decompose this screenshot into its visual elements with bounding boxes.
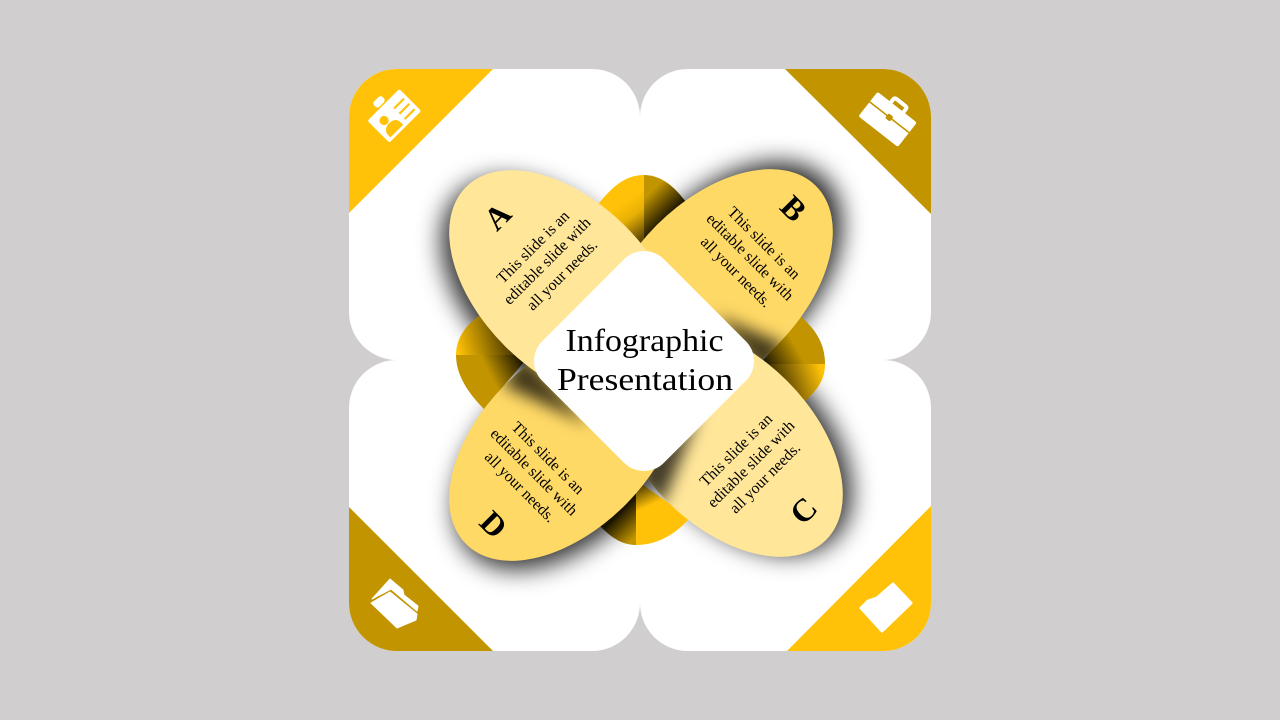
title: Infographic bbox=[566, 322, 724, 358]
icon: id card bbox=[361, 83, 421, 143]
panel: top-left quadrant bbox=[349, 69, 640, 360]
corner triangle: bottom-right bbox=[787, 506, 931, 651]
shadow on C near diamond bbox=[648, 420, 707, 506]
panel: bottom-left quadrant bbox=[349, 360, 640, 651]
text block A: This slide is an bbox=[494, 208, 573, 287]
text block C: This slide is an bbox=[697, 411, 776, 490]
text block D: This slide is an bbox=[508, 419, 587, 498]
shadow on B near diamond bbox=[715, 308, 788, 359]
shadow on D near diamond bbox=[503, 352, 590, 425]
panel: top-right quadrant bbox=[640, 69, 931, 360]
letter C: C bbox=[782, 489, 824, 531]
petal B bbox=[558, 126, 876, 444]
letter D: D bbox=[473, 503, 515, 545]
back petal: bottom bbox=[598, 480, 690, 545]
icon: open folder bbox=[371, 579, 418, 628]
icon: closed folder bbox=[861, 584, 911, 631]
corner triangle: bottom-left bbox=[349, 507, 493, 651]
icon: briefcase bbox=[858, 87, 921, 147]
back petal: right bbox=[760, 316, 825, 403]
back petal: left bbox=[456, 315, 530, 409]
letter B: B bbox=[773, 188, 814, 229]
text block C: editable slide with bbox=[704, 417, 798, 511]
corner triangle: top-left bbox=[349, 69, 493, 213]
text block A: editable slide with bbox=[500, 214, 594, 308]
text block B: all your needs. bbox=[697, 234, 774, 311]
title: Presentation bbox=[557, 361, 733, 397]
text block D: editable slide with bbox=[487, 425, 581, 519]
petal A bbox=[406, 127, 724, 445]
text block D: all your needs. bbox=[481, 449, 558, 526]
petal D bbox=[406, 286, 724, 604]
letter A: A bbox=[476, 195, 518, 237]
back petal: top bbox=[596, 175, 692, 250]
text block A: all your needs. bbox=[524, 237, 601, 314]
text block B: This slide is an bbox=[724, 204, 803, 283]
outer petal shadows bbox=[398, 119, 895, 613]
text block B: editable slide with bbox=[703, 210, 797, 304]
corner triangle: top-right bbox=[785, 69, 931, 214]
panel: bottom-right quadrant bbox=[640, 360, 931, 651]
petal C bbox=[568, 282, 886, 600]
text block C: all your needs. bbox=[727, 440, 804, 517]
infographic canvas bbox=[349, 69, 931, 651]
center diamond bbox=[522, 239, 766, 483]
title bbox=[557, 322, 733, 397]
